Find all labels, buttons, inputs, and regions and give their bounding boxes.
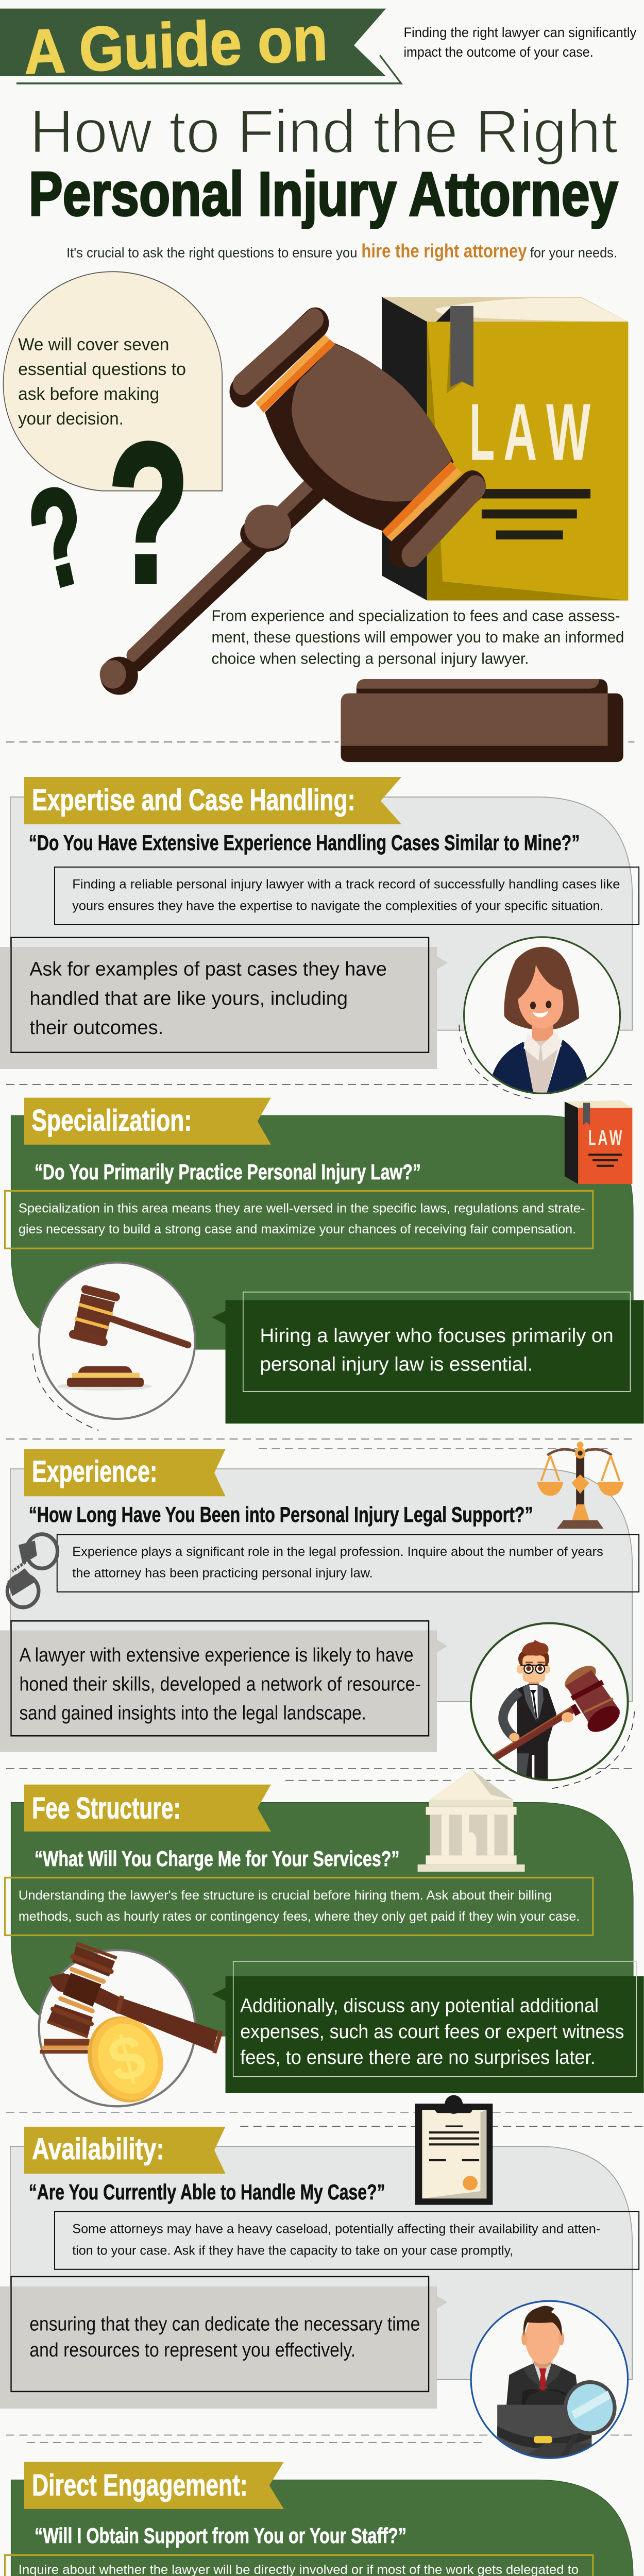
heading ribbon: Experience: (32, 1455, 157, 1488)
icon: clipboard document (415, 2095, 493, 2205)
icon: attorney holding gavel (471, 1623, 628, 1784)
text box: Specialization in this area means they are well-versed in the specific laws, regulations and strate- (19, 1201, 585, 1216)
heading ribbon: Fee Structure: (32, 1791, 181, 1825)
panel: availability (0, 2095, 642, 2460)
icon: law book (382, 297, 628, 601)
icon: red law book: A (598, 1126, 608, 1150)
icon: large gavel (100, 319, 476, 695)
callout (0, 1621, 448, 1752)
icon: female attorney portrait (464, 937, 620, 1095)
callout: handled that are like yours, including (29, 987, 348, 1009)
icon: courthouse (418, 1769, 525, 1872)
text: intro summary: From experience and specialization to fees and case assess- (211, 607, 620, 625)
heading ribbon (24, 777, 401, 824)
text box: the attorney has been practicing personal injury law. (72, 1566, 373, 1581)
callout: personal injury law is essential. (260, 1353, 533, 1375)
callout: expenses, such as court fees or expert witness (240, 2021, 624, 2042)
question: “Will I Obtain Support from You or Your Staff?” (35, 2523, 406, 2548)
speech bubble: your decision. (18, 409, 124, 429)
icon: small handcuffs (7, 1534, 58, 1607)
heading ribbon: Expertise and Case Handling: (32, 784, 355, 817)
icon: law book: A (503, 387, 537, 478)
heading ribbon: Availability: (32, 2132, 164, 2166)
callout: Additionally, discuss any potential additional (240, 1994, 599, 2016)
callout: and resources to represent you effectively. (29, 2338, 355, 2361)
icon: gavel and coin: $ (101, 2021, 152, 2096)
speech bubble: essential questions to (18, 359, 186, 379)
icon: gavel and coin (39, 1943, 221, 2113)
callout: honed their skills, developed a network of resource- (19, 1673, 421, 1695)
text box: yours ensures they have the expertise to navigate the complexities of your specific situation. (72, 899, 604, 913)
icon: law book: W (546, 387, 590, 478)
question: “Are You Currently Able to Handle My Case?” (29, 2180, 385, 2204)
icon: gavel sound block (341, 679, 623, 762)
subtitle (66, 241, 617, 262)
text box (57, 1535, 639, 1592)
subtitle: hire the right attorney (361, 241, 527, 262)
callout (212, 1961, 644, 2093)
icon: gavel in circle (39, 1263, 195, 1419)
icon: red law book: W (609, 1126, 622, 1150)
callout: their outcomes. (29, 1016, 163, 1038)
icon: red law book (565, 1100, 632, 1184)
question: “Do You Primarily Practice Personal Injury Law?” (35, 1160, 421, 1184)
title: Personal Injury Attorney (29, 159, 618, 229)
text box: gies necessary to build a strong case and maximize your chances of receiving fair compensation. (19, 1223, 576, 1236)
text: top note (403, 25, 637, 60)
callout (0, 2277, 448, 2409)
subtitle: It's crucial to ask the right questions to ensure you (66, 245, 357, 261)
intro section (0, 4, 637, 762)
banner: A Guide on: A Guide on (23, 4, 329, 88)
icon: question marks (17, 401, 190, 625)
text: intro summary (211, 607, 624, 668)
text box: Some attorneys may have a heavy caseload, potentially affecting their availability and atten- (72, 2222, 600, 2236)
heading ribbon (24, 2462, 284, 2509)
callout: ensuring that they can dedicate the necessary time (29, 2313, 420, 2335)
text box (5, 2555, 593, 2576)
text box (5, 1877, 593, 1935)
speech bubble: ask before making (18, 384, 159, 404)
icon: question marks: ? (17, 455, 100, 620)
callout: fees, to ensure there are no surprises later. (240, 2046, 596, 2068)
callout: Ask for examples of past cases they have (29, 958, 387, 980)
panel: experience (0, 1439, 639, 1788)
callout: sand gained insights into the legal landscape. (19, 1702, 366, 1724)
icon: scales of justice (537, 1442, 624, 1529)
text: intro summary: ment, these questions will empower you to make an informed (211, 629, 624, 646)
text box: Experience plays a significant role in the legal profession. Inquire about the number of years (72, 1545, 603, 1559)
question: “What Will You Charge Me for Your Services?” (35, 1846, 399, 1871)
title: How to Find the Right (29, 98, 618, 166)
text box: Finding a reliable personal injury lawyer with a track record of successfully handling cases like (72, 877, 620, 892)
callout: A lawyer with extensive experience is likely to have (19, 1643, 414, 1666)
callout: Hiring a lawyer who focuses primarily on (260, 1324, 614, 1346)
heading ribbon (24, 1449, 226, 1496)
text: top note: impact the outcome of your case. (403, 45, 594, 60)
icon: question marks: ? (108, 401, 190, 625)
text box: methods, such as hourly rates or contingency fees, where they only get paid if they win your case. (19, 1910, 580, 1924)
text box: Understanding the lawyer's fee structure is crucial before hiring them. Ask about their billing (19, 1888, 552, 1903)
question: “How Long Have You Been into Personal Injury Legal Support?” (29, 1502, 533, 1527)
icon: law book: L (469, 387, 495, 478)
panel: expertise and case handling (0, 777, 639, 1099)
heading ribbon: Specialization: (31, 1104, 192, 1138)
text: top note: Finding the right lawyer can significantly (403, 25, 637, 41)
text box (55, 2212, 639, 2269)
heading ribbon: Direct Engagement: (32, 2468, 248, 2502)
heading ribbon (24, 1785, 271, 1832)
icon: attorney with briefcase (471, 2301, 628, 2460)
text box (55, 867, 639, 924)
subtitle: for your needs. (530, 245, 617, 261)
callout (0, 938, 448, 1069)
text box: tion to your case. Ask if they have the capacity to take on your case promptly, (72, 2244, 513, 2258)
text box (5, 1191, 593, 1248)
panel: specialization (5, 1098, 644, 1430)
title (29, 98, 618, 229)
heading ribbon (24, 1098, 271, 1145)
icon: red law book: L (588, 1126, 596, 1150)
panel: direct engagement (5, 2462, 644, 2576)
panel: fee structure (5, 1769, 644, 2093)
speech bubble: We will cover seven (18, 334, 169, 354)
speech bubble (3, 272, 222, 491)
callout (212, 1292, 644, 1423)
text: intro summary: choice when selecting a personal injury lawyer. (211, 650, 529, 668)
heading ribbon (24, 2127, 226, 2174)
